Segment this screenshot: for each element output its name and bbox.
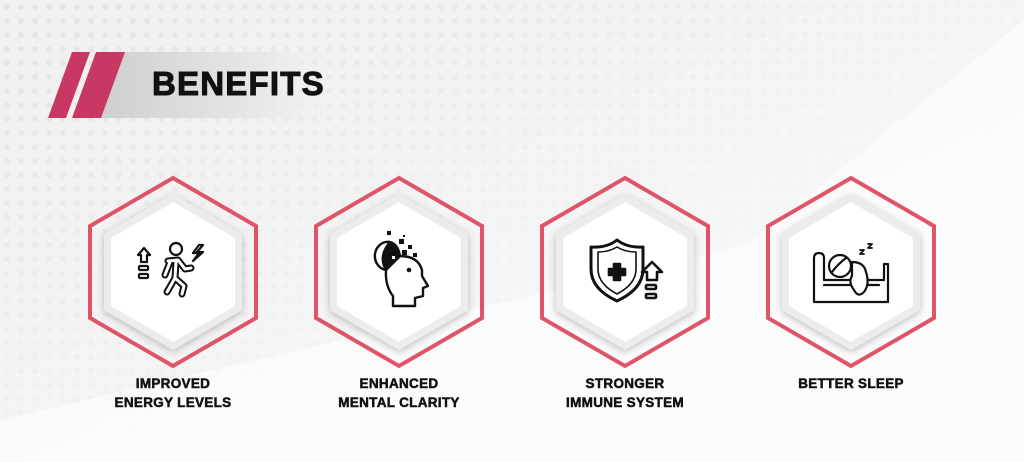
icon: head with stars [375,231,428,306]
label: enhanced mental clarity: ENHANCED [360,376,438,391]
label: better sleep: BETTER SLEEP [798,376,904,391]
card: stronger immune system [542,178,708,366]
label: improved energy levels: ENERGY LEVELS [115,395,231,410]
card: improved energy levels [90,178,256,366]
icon: shield [591,240,662,301]
icon: sleeping person [814,244,888,302]
label: stronger immune system: IMMUNE SYSTEM [566,395,684,410]
card: enhanced mental clarity [316,178,482,366]
card: better sleep [768,178,934,366]
label: enhanced mental clarity: MENTAL CLARITY [338,395,460,410]
icon: energy walker [138,243,203,294]
title bar [48,52,340,118]
label: improved energy levels: IMPROVED [136,376,210,391]
label: stronger immune system: STRONGER [586,376,664,391]
title: BENEFITS [152,65,325,102]
